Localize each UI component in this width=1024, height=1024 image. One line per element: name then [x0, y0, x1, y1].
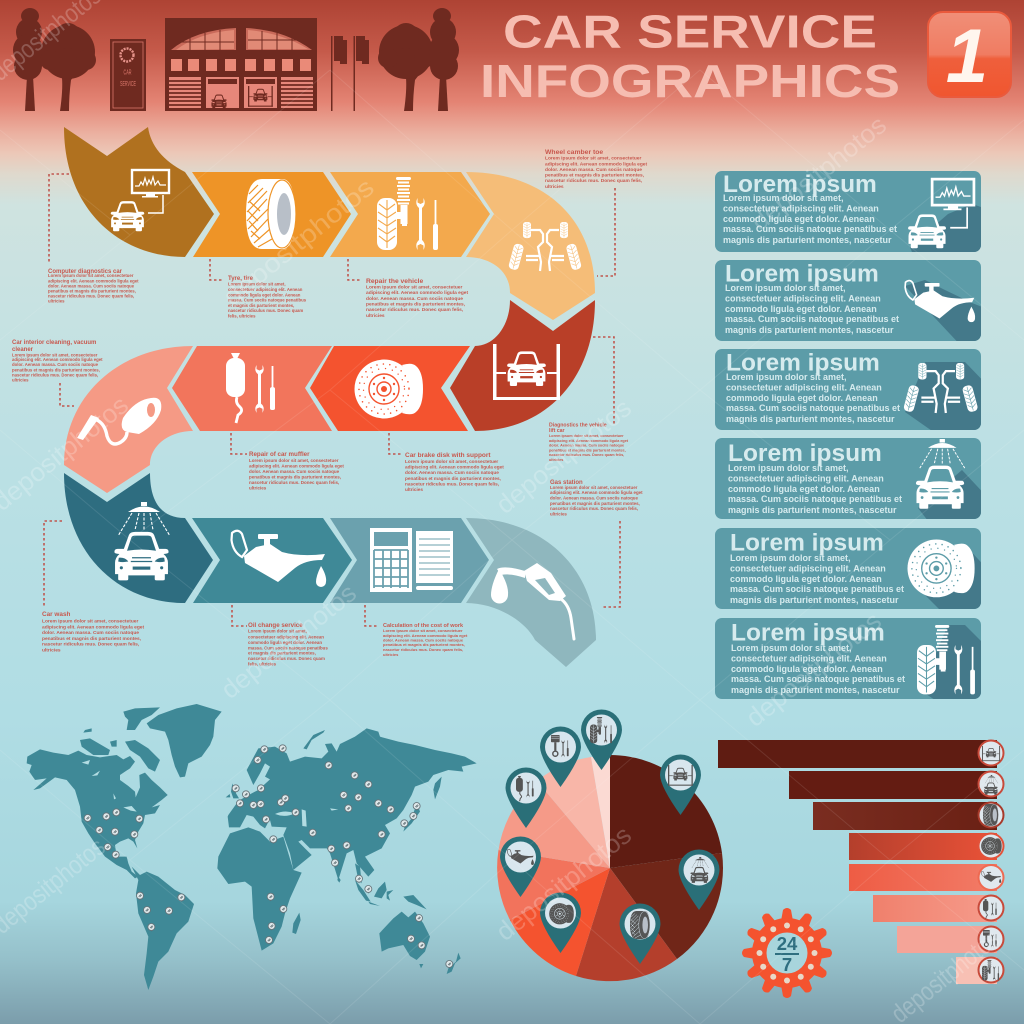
label: repair the vehicle: Lorem ipsum dolor sit amet, consectetuer	[366, 284, 462, 290]
label: brake disk: nascetur ridiculus mus. Donec quam felis,	[405, 482, 499, 486]
ribbon segment: muffler	[172, 346, 332, 431]
label: brake disk: penatibus et magnis dis parturient montes,	[405, 476, 501, 481]
panel 1: diagnostics: Lorem ipsum dolor sit amet,	[723, 193, 844, 203]
ribbon segment: tyre	[192, 172, 351, 257]
panel 4: car wash	[715, 438, 981, 519]
ribbon segment: brake disk	[310, 346, 470, 431]
label: computer diagnostics: adipiscing elit. Aenean commodo ligula eget	[48, 278, 139, 283]
label: calculation: dolor. Aenean massa. Cum sociis natoque	[383, 638, 464, 642]
panel 6: repair: commodo ligula eget dolor. Aenean	[731, 664, 883, 674]
panel 3: suspension: magnis dis parturient montes, nascetur	[726, 414, 895, 424]
ribbon segment: oil change	[192, 518, 352, 603]
panel 2: oil: consectetuer adipiscing elit. Aenean	[725, 294, 881, 304]
panel 1: diagnostics: commodo ligula eget dolor. Aenean	[723, 214, 875, 224]
ribbon segment: calculation	[330, 518, 489, 603]
label: gas station: adipiscing elit. Aenean commodo ligula eget	[550, 490, 643, 495]
labels around ribbon	[12, 149, 647, 666]
label: calculation: penatibus et magnis dis parturient montes,	[383, 642, 465, 647]
label: oil change: consectetuer adipiscing elit. Aenean	[248, 634, 324, 640]
label: repair the vehicle: Repair the vehicle	[366, 278, 423, 285]
label: repair the vehicle: penatibus et magnis dis parturient montes,	[366, 302, 466, 308]
title: CAR SERVICE	[503, 6, 877, 58]
label: oil change: et magnis dis parturient montes,	[248, 650, 316, 656]
pin: muffler	[506, 767, 546, 828]
ribbon segment: computer diagnostics	[64, 127, 214, 257]
panel 5: brake: Lorem ipsum dolor sit amet,	[730, 553, 851, 563]
label: car wash: dolor. Aenean massa. Cum sociis natoque	[42, 630, 139, 636]
map pins	[84, 745, 453, 969]
label: oil change: felis, ultricies	[248, 662, 277, 666]
panel 5: brake: massa. Cum sociis natoque penatibus et	[730, 584, 904, 594]
badge: number 1	[928, 12, 1011, 99]
label: computer diagnostics: nascetur ridiculus mus. Donec quam felis,	[48, 294, 134, 298]
label: brake disk: ultricies	[405, 487, 423, 492]
panel 5: brake: magnis dis parturient montes, nascetur	[730, 595, 899, 605]
label: gas station: nascetur ridiculus mus. Donec quam felis,	[550, 506, 638, 511]
ribbon segment: repair the vehicle	[330, 172, 490, 257]
label: computer diagnostics: Lorem ipsum dolor sit amet, consectetuer	[48, 273, 134, 278]
label: interior cleaning: Car interior cleaning, vacuum	[12, 340, 96, 346]
icon: round tree left	[40, 23, 96, 111]
label: diagnostics the vehicle: dolor. Aenean massa. Cum sociis natoque	[549, 444, 624, 448]
label: calculation: nascetur ridiculus mus. Donec quam felis,	[383, 647, 463, 652]
dashed connector lines	[44, 174, 620, 626]
label: oil change: massa. Cum sociis natoque penatibus	[248, 646, 328, 650]
label: repair the vehicle: nascetur ridiculus mus. Donec quam felis,	[366, 307, 464, 313]
pie chart with pins	[497, 709, 723, 981]
label: tyre: massa. Cum sociis natoque penatibus	[228, 298, 307, 303]
panel 3: suspension: commodo ligula eget dolor. Aenean	[726, 393, 878, 403]
label: diagnostics the vehicle: Lorem ipsum dolor sit amet, consectetuer	[549, 434, 624, 438]
label: gas station: Gas station	[550, 480, 583, 486]
bars	[718, 740, 997, 984]
label: muffler: dolor. Aenean massa. Cum sociis natoque	[249, 469, 340, 474]
pin: lift	[660, 754, 701, 815]
panel 2: oil: Lorem ipsum	[725, 260, 879, 288]
panel 3: suspension	[715, 349, 981, 430]
header scene: trees, sign and service building	[13, 8, 459, 111]
label: calculation: Calculation of the cost of work	[383, 623, 463, 629]
pin: repair	[581, 709, 622, 770]
panel 1: diagnostics: magnis dis parturient montes, nascetur	[723, 235, 892, 245]
label: repair the vehicle: ultricies	[366, 313, 385, 319]
panel 2: oil: massa. Cum sociis natoque penatibus et	[725, 314, 899, 324]
title	[480, 6, 900, 107]
pin: oil	[500, 836, 541, 897]
label: wheel camber toe: ultricies	[545, 184, 564, 190]
label: tyre: Tyre, tire	[228, 276, 253, 282]
label: wheel camber toe: dolor. Aenean massa. Cum sociis natoque	[545, 167, 642, 173]
right column info panels	[715, 171, 990, 710]
label: computer diagnostics: dolor. Aenean massa. Cum sociis natoque	[48, 284, 135, 288]
panel 5: brake	[715, 528, 981, 609]
label: interior cleaning: nascetur ridiculus mus. Donec quam felis,	[12, 372, 98, 378]
label: diagnostics the vehicle: adipiscing elit. Aenean commodo ligula eget	[549, 439, 629, 443]
panel 3: suspension: Lorem ipsum dolor sit amet,	[726, 372, 847, 382]
label: brake disk: Car brake disk with support	[405, 452, 491, 459]
panel 1: diagnostics: Lorem ipsum	[723, 171, 877, 198]
panel 3: suspension: consectetuer adipiscing elit. Aenean	[726, 382, 882, 392]
label: car wash: ultricies	[42, 648, 61, 654]
badge: number 1: 1	[946, 14, 988, 99]
label: muffler: penatibus et magnis dis parturient montes,	[249, 474, 341, 480]
panel 1: diagnostics: consectetuer adipiscing elit. Aenean	[723, 204, 879, 214]
label: diagnostics the vehicle: lift car	[549, 428, 565, 434]
label: tyre: Lorem ipsum dolor sit amet,	[228, 282, 286, 286]
label: muffler: Lorem ipsum dolor sit amet, consectetuer	[249, 458, 339, 463]
panel 2: oil	[715, 260, 981, 341]
label: car wash: Lorem ipsum dolor sit amet, consectetuer	[42, 618, 138, 624]
icon: round tree right	[378, 23, 434, 111]
ribbon segment: car wash	[64, 473, 213, 603]
label: muffler: Repair of car muffler	[249, 451, 310, 458]
icon: service station building	[165, 18, 317, 111]
panel 1: diagnostics: massa. Cum sociis natoque penatibus et	[723, 224, 897, 234]
label: calculation: ultricies	[383, 652, 399, 657]
label: interior cleaning: penatibus et magnis dis parturient montes,	[12, 368, 100, 372]
label: tyre: felis, ultricies	[228, 314, 256, 318]
ribbon segment: wheel camber	[466, 172, 595, 320]
panel 3: suspension: massa. Cum sociis natoque penatibus et	[726, 403, 900, 413]
panel 5: brake: commodo ligula eget dolor. Aenean	[730, 574, 882, 584]
icon: car service door sign: CAR	[124, 70, 132, 76]
panel 6: repair: massa. Cum sociis natoque penatibus et	[731, 674, 905, 684]
label: tyre: nascetur ridiculus mus. Donec quam	[228, 308, 303, 313]
panel 2: oil: commodo ligula eget dolor. Aenean	[725, 304, 877, 314]
panel 4: car wash: magnis dis parturient montes, nascetur	[728, 505, 897, 515]
label: car wash: Car wash	[42, 611, 70, 618]
label: interior cleaning: cleaner	[12, 347, 34, 353]
panel 4: car wash: consectetuer adipiscing elit. Aenean	[728, 474, 884, 484]
label: muffler: adipiscing elit. Aenean commodo ligula eget	[249, 464, 344, 468]
panel 1: diagnostics	[715, 171, 981, 252]
gear badge 24/7: 24	[777, 933, 798, 954]
stock photo watermark: depositphotos	[215, 578, 362, 705]
label: diagnostics the vehicle: ultricies	[549, 458, 563, 462]
label: calculation: adipiscing elit. Aenean commodo ligula eget	[383, 633, 468, 638]
label: gas station: ultricies	[550, 512, 567, 516]
pin: car wash	[678, 849, 720, 910]
label: wheel camber toe: nascetur ridiculus mus. Donec quam felis,	[545, 178, 643, 184]
label: computer diagnostics: penatibus et magnis dis parturient montes,	[48, 288, 136, 294]
label: diagnostics the vehicle: nascetur ridiculus mus. Donec quam felis,	[549, 453, 624, 457]
icon: tall tree right	[429, 8, 459, 111]
gear badge 24/7: 7	[782, 954, 792, 975]
pie slices	[497, 755, 723, 981]
panel 4: car wash: massa. Cum sociis natoque penatibus et	[728, 494, 902, 504]
icon: tall tree left	[13, 8, 43, 111]
label: oil change: commodo ligula eget dolor. Aenean	[248, 640, 322, 645]
pin: piston	[540, 726, 581, 787]
label: diagnostics the vehicle: penatibus et magnis dis parturient montes,	[549, 448, 626, 452]
ribbon segment: gas station	[466, 518, 596, 667]
icon: car service door sign	[110, 39, 146, 111]
label: computer diagnostics: Computer diagnostics car	[48, 269, 122, 275]
label: repair the vehicle: dolor. Aenean massa. Cum sociis natoque	[366, 296, 463, 302]
label: wheel camber toe: adipiscing elit. Aenean commodo ligula eget	[545, 162, 647, 168]
panel 5: brake: Lorem ipsum	[730, 530, 884, 556]
label: brake disk: adipiscing elit. Aenean commodo ligula eget	[405, 464, 504, 470]
ribbon segment: vehicle lift	[450, 300, 595, 431]
pin: brake	[540, 892, 581, 953]
panel 4: car wash: Lorem ipsum	[728, 440, 882, 467]
stock photo watermark: depositphotos	[490, 820, 637, 947]
panel 6: repair: Lorem ipsum dolor sit amet,	[731, 643, 852, 653]
label: oil change: Lorem ipsum dolor sit amet,	[248, 628, 307, 634]
icon: car service door sign: SERVICE	[120, 81, 136, 88]
label: repair the vehicle: adipiscing elit. Aenean commodo ligula eget	[366, 290, 468, 296]
label: oil change: Oil change service	[248, 622, 303, 629]
panel 2: oil: magnis dis parturient montes, nascetur	[725, 325, 894, 335]
label: car wash: penatibus et magnis dis parturient montes,	[42, 636, 142, 642]
ribbon segment: vacuum cleaning	[64, 346, 193, 493]
bar badges	[978, 740, 1004, 982]
label: car wash: nascetur ridiculus mus. Donec quam felis,	[42, 642, 140, 648]
label: computer diagnostics: ultricies	[48, 298, 65, 304]
stock photo watermark: depositphotos	[740, 606, 887, 733]
panel 5: brake: consectetuer adipiscing elit. Aenean	[730, 564, 886, 574]
panel 6: repair: consectetuer adipiscing elit. Aenean	[731, 654, 887, 664]
label: oil change: nascetur ridiculus mus. Donec quam	[248, 656, 325, 661]
panel 3: suspension: Lorem ipsum	[726, 350, 880, 376]
gear badge 24/7	[742, 908, 832, 998]
label: wheel camber toe: Lorem ipsum dolor sit amet, consectetuer	[545, 156, 641, 162]
panel 6: repair: Lorem ipsum	[731, 620, 885, 646]
label: gas station: dolor. Aenean massa. Cum sociis natoque	[550, 496, 638, 500]
world map with pins	[27, 704, 477, 990]
icon: flags	[331, 36, 369, 111]
horizontal bar chart	[718, 740, 1004, 984]
label: interior cleaning: Lorem ipsum dolor sit amet, consectetuer	[12, 352, 98, 358]
label: muffler: ultricies	[249, 486, 267, 490]
stock photo watermark: depositphotos	[217, 172, 380, 312]
label: tyre: commodo ligula eget dolor. Aenean	[228, 292, 301, 298]
label: muffler: nascetur ridiculus mus. Donec quam felis,	[249, 480, 339, 485]
label: gas station: penatibus et magnis dis parturient montes,	[550, 501, 640, 506]
pin: tire	[620, 903, 660, 964]
label: diagnostics the vehicle: Diagnostics the vehicle	[549, 422, 607, 428]
label: interior cleaning: ultricies	[12, 378, 29, 382]
label: car wash: adipiscing elit. Aenean commodo ligula eget	[42, 624, 144, 630]
panel 2: oil: Lorem ipsum dolor sit amet,	[725, 283, 846, 293]
panel 6: repair: magnis dis parturient montes, nascetur	[731, 685, 900, 695]
panel 4: car wash: commodo ligula eget dolor. Aenean	[728, 484, 880, 494]
process ribbon	[64, 127, 596, 667]
panel 4: car wash: Lorem ipsum dolor sit amet,	[728, 463, 849, 473]
label: wheel camber toe: penatibus et magnis dis parturient montes,	[545, 172, 645, 178]
label: interior cleaning: adipiscing elit. Aenean commodo ligula eget	[12, 357, 103, 362]
label: brake disk: Lorem ipsum dolor sit amet, consectetuer	[405, 459, 498, 464]
label: calculation: Lorem ipsum dolor sit amet, consectetuer	[383, 628, 463, 633]
label: tyre: et magnis dis parturient montes,	[228, 303, 294, 308]
title: INFOGRAPHICS	[480, 55, 900, 107]
stock photo watermark: depositphotos	[490, 393, 637, 520]
label: gas station: Lorem ipsum dolor sit amet, consectetuer	[550, 485, 638, 490]
panel 6: repair	[715, 618, 981, 699]
label: tyre: consectetuer adipiscing elit. Aenean	[228, 287, 303, 292]
stock photo watermark: depositphotos	[745, 110, 892, 237]
label: interior cleaning: dolor. Aenean massa. Cum sociis natoque	[12, 362, 99, 367]
label: wheel camber toe: Wheel camber toe	[545, 149, 603, 156]
label: brake disk: dolor. Aenean massa. Cum sociis natoque	[405, 470, 499, 475]
